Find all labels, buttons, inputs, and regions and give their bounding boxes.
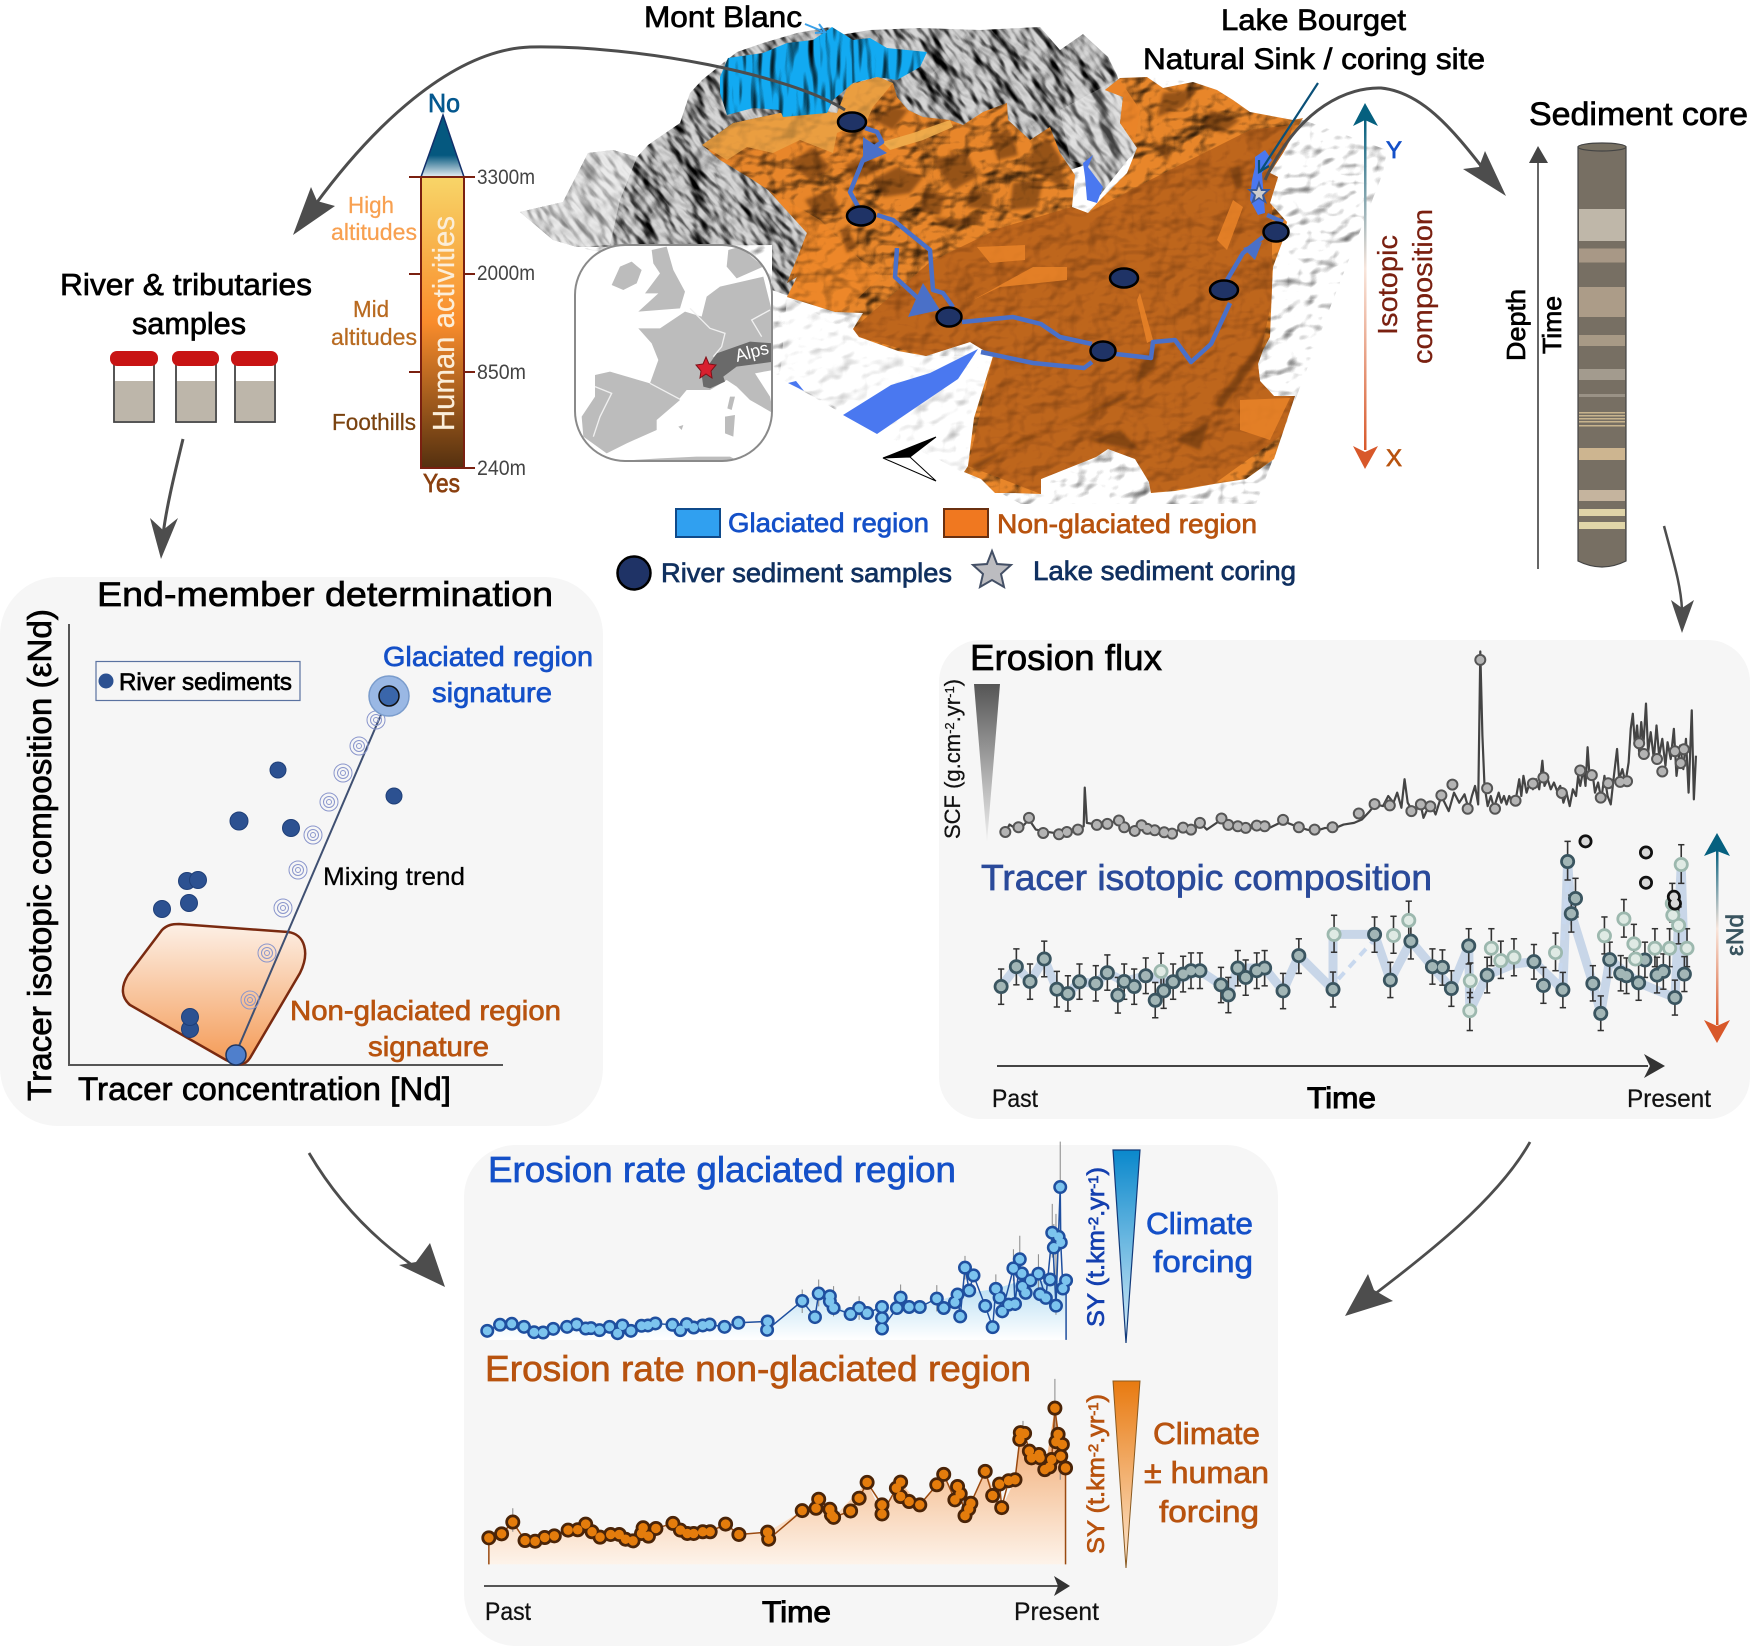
altitude zone labels: High: [348, 192, 394, 218]
panel: erosion rates: [464, 1145, 1278, 1646]
label: Past: Past: [485, 1598, 531, 1626]
blue gradient wedge: [1113, 1150, 1140, 1343]
mixing line: [236, 696, 389, 1053]
axis label: SCF: -2: [942, 722, 957, 734]
river sediment sample sites: [838, 112, 1288, 360]
heading: sediment core: Sediment core: [1529, 96, 1748, 132]
heading: end-member determination: End-member determination: [97, 576, 553, 614]
label: non-glaciated region signature: [290, 995, 561, 1062]
label: No: No: [428, 88, 460, 118]
3D terrain map of the Alpine catchment: [520, 27, 1386, 504]
bright ridges: [973, 80, 1290, 440]
label: climate plus or minus human forcing: Climate: [1153, 1416, 1260, 1451]
legend: river sediments: [96, 662, 300, 700]
axis label: SY non-glaciated: .yr: [1083, 1416, 1110, 1444]
arrow: samples to end-member: [150, 439, 183, 559]
bright orange western slopes: [768, 190, 880, 312]
altitude zone labels: Foothills: [332, 409, 416, 435]
axis label: SCF: SCF (g.cm: [940, 734, 965, 839]
arrow: pointer to coring site: [1259, 83, 1318, 172]
map legend: [618, 508, 1296, 590]
non-glaciated hull: [123, 924, 305, 1064]
lakes: [788, 150, 1272, 434]
erosion flux panel content: [940, 637, 1749, 1115]
arrow: end-member to erosion rate: [309, 1153, 445, 1287]
label: Present: Present: [1014, 1598, 1099, 1626]
label: Isotopic composition: composition: [1407, 209, 1438, 364]
label: Y: Y: [1386, 137, 1402, 164]
label: climate forcing: forcing: [1153, 1244, 1253, 1279]
axis label: SY non-glaciated: ): [1083, 1394, 1110, 1402]
axis label: SY glaciated: SY (t.km: [1083, 1235, 1110, 1327]
label: Present: Present: [1627, 1085, 1711, 1113]
isotopic composition axis arrow: [1353, 103, 1378, 469]
label: Isotopic composition: Isotopic: [1372, 235, 1403, 335]
altitude zone labels: [331, 192, 417, 435]
arrow: map to sediment core: [1265, 88, 1506, 196]
label: glaciated region signature: [383, 641, 593, 708]
altitude tick labels: 850m: [477, 361, 526, 384]
glaciated erosion rate chart: [487, 1142, 1066, 1340]
label: Depth: Depth: [1501, 289, 1531, 361]
legend: river sediments: River sediments: [119, 669, 292, 696]
label: Alps: Alps: [733, 338, 771, 366]
label: non-glaciated region signature: signature: [368, 1031, 489, 1062]
label: epsilon Nd: εNd: [1722, 914, 1749, 956]
arrow: Mont Blanc pointer: [805, 24, 825, 33]
label: glaciated region signature: Glaciated region: [383, 641, 593, 672]
icon: red star study site: [696, 357, 716, 378]
map legend: Lake sediment coring: [1033, 556, 1296, 586]
heading: erosion flux: Erosion flux: [970, 637, 1162, 678]
river network: [850, 128, 1283, 368]
time axis arrow: [484, 1576, 1070, 1596]
label: Time: Time: [762, 1596, 831, 1629]
label: Yes: Yes: [423, 468, 460, 498]
label: Natural Sink / coring site: Natural Sink / coring site: [1143, 43, 1485, 76]
altitude zone labels: altitudes: [331, 219, 417, 245]
axis label: SY glaciated: .yr: [1083, 1189, 1110, 1217]
axis label: SY non-glaciated: -2: [1085, 1444, 1101, 1457]
altitude tick labels: [477, 166, 535, 480]
tracer isotopic time series: [1001, 841, 1687, 1031]
depth and time arrow: [1529, 146, 1548, 569]
altitude zone labels: Mid: [353, 296, 389, 322]
axis label: SY glaciated: -1: [1085, 1175, 1101, 1189]
label: glaciated region signature: signature: [432, 677, 552, 708]
altitude tick labels: 2000m: [477, 262, 535, 285]
SCF gradient wedge: [974, 684, 1000, 842]
heading: river and tributaries samples: [60, 267, 312, 341]
axis label: tracer concentration: Tracer concentration [Nd]: [78, 1071, 451, 1107]
time axis arrow: [997, 1054, 1665, 1078]
epsilon Nd axis arrow: [1704, 833, 1730, 1043]
heading: river and tributaries samples: River & tributaries: [60, 267, 312, 302]
label: Time: Time: [1307, 1082, 1376, 1115]
arrow: map to river samples: [293, 47, 845, 235]
map legend: Glaciated region: [728, 508, 929, 538]
panel: end-member determination: [0, 577, 603, 1126]
axis label: SY non-glaciated: -1: [1085, 1402, 1101, 1416]
label: Lake Bourget: Lake Bourget: [1221, 4, 1407, 37]
mixing trend rings: [241, 711, 385, 1009]
human activities altitude bar: [409, 115, 475, 468]
label: Isotopic composition: [1372, 209, 1438, 364]
label: non-glaciated region signature: Non-glaciated region: [290, 995, 561, 1026]
shaded peaks: [790, 90, 1270, 469]
axis label: SY glaciated: -2: [1085, 1217, 1101, 1230]
lake coring star on map: [1247, 180, 1271, 204]
heading: river and tributaries samples: samples: [132, 306, 246, 341]
map legend: River sediment samples: [661, 558, 952, 588]
light orange upper band: [702, 77, 893, 160]
arrow: erosion flux to erosion rate: [1345, 1142, 1530, 1316]
SCF flux time series: [1005, 652, 1696, 834]
label: climate forcing: Climate: [1146, 1206, 1253, 1241]
sediment core column: [1578, 143, 1626, 567]
icon: sample vials: [110, 351, 278, 422]
label: climate plus or minus human forcing: ± human: [1144, 1455, 1269, 1490]
label: mixing trend: Mixing trend: [323, 863, 465, 891]
label: climate forcing: [1146, 1206, 1253, 1279]
axis label: isotopic composition: Tracer isotopic composition (εNd): [21, 609, 58, 1101]
altitude zone labels: altitudes: [331, 324, 417, 350]
north arrow: [883, 437, 936, 481]
glaciated end-member point: [369, 676, 409, 716]
axis label: SCF: .yr: [940, 698, 965, 722]
end-member chart: [21, 576, 593, 1107]
axis label: SCF: -1: [942, 686, 957, 698]
heading: tracer isotopic composition: Tracer isotopic composition: [981, 857, 1432, 898]
altitude tick labels: 240m: [477, 457, 526, 480]
axis label: SY glaciated: ): [1083, 1167, 1110, 1175]
inset map of Europe: [575, 245, 773, 462]
label: Mont Blanc: Mont Blanc: [644, 1, 802, 34]
label: X: X: [1386, 445, 1402, 472]
label: Past: Past: [992, 1085, 1038, 1113]
non-glaciated end-member point: [226, 1045, 246, 1065]
non-glaciated erosion rate chart: [489, 1379, 1066, 1564]
label: Time: Time: [1537, 296, 1567, 354]
axis label: SY non-glaciated: SY (t.km: [1083, 1462, 1110, 1554]
altitude tick labels: 3300m: [477, 166, 535, 189]
map legend: Non-glaciated region: [997, 509, 1257, 539]
erosion rate panel content: [484, 1142, 1269, 1629]
heading: erosion rate glaciated: Erosion rate glaciated region: [488, 1149, 956, 1190]
label: climate plus or minus human forcing: [1144, 1416, 1269, 1529]
label: Human activities: Human activities: [426, 216, 461, 431]
axes: [69, 624, 503, 1065]
river sediment points: [154, 762, 402, 1038]
flat brown lowlands: [853, 125, 1295, 494]
panel: erosion flux and tracer composition: [939, 640, 1750, 1119]
orange gradient wedge: [1113, 1381, 1140, 1568]
axis label: SCF: ): [940, 679, 965, 686]
heading: erosion rate non-glaciated: Erosion rate non-glaciated region: [485, 1348, 1031, 1389]
label: climate plus or minus human forcing: forcing: [1159, 1494, 1259, 1529]
arrow: core to erosion flux: [1664, 526, 1694, 633]
